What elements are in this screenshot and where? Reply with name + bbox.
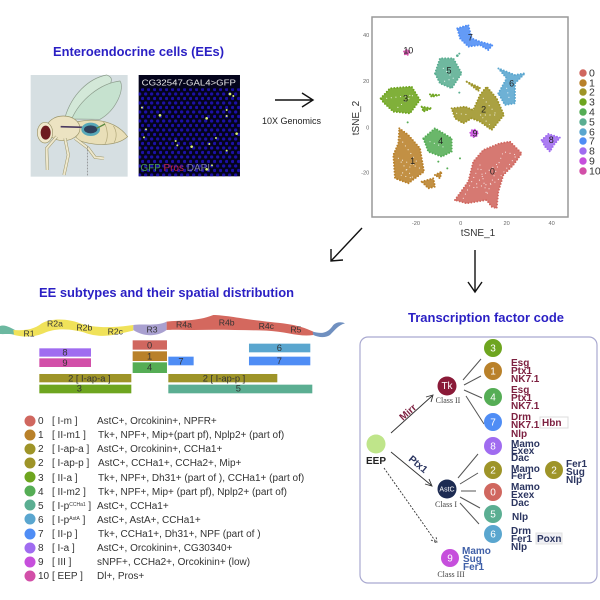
subtype 1 bbox=[484, 358, 540, 385]
subtype 7: Drm bbox=[511, 412, 531, 423]
list: EE subtype markers: [ I-a ] bbox=[52, 543, 75, 554]
node: EEP bbox=[366, 434, 386, 467]
list: EE subtype markers: 10 bbox=[38, 571, 50, 582]
cluster 9 bbox=[470, 130, 478, 137]
list: EE subtype markers: [ I-ap-p ] bbox=[52, 458, 89, 469]
subtype 7: Nlp bbox=[511, 429, 527, 440]
node: AstC class I: AstC bbox=[439, 486, 455, 494]
chart: subtype distribution bars: 8 bbox=[62, 348, 68, 358]
list: EE subtype markers: 9 bbox=[38, 557, 44, 568]
list: EE subtype markers: AstC+, CCHa1+, CCHa2+, Mip+ bbox=[98, 458, 242, 469]
chart: subtype distribution bars: 7 bbox=[277, 356, 282, 366]
list: EE subtype markers: [ II-a ] bbox=[52, 473, 78, 484]
list: EE subtype markers: AstA bbox=[69, 516, 80, 522]
list: EE subtype markers: CCHa1 bbox=[69, 502, 86, 508]
legend: clusters: 5 bbox=[589, 116, 595, 128]
cluster 0 bbox=[455, 142, 522, 208]
subtype 4: 4 bbox=[490, 392, 496, 404]
subtype 1: NK7.1 bbox=[511, 374, 540, 385]
list: EE subtype markers: 5 bbox=[38, 501, 44, 512]
list: EE subtype markers: AstC+, Orcokinin+, CCHa1+ bbox=[97, 444, 222, 455]
subtype 6: 6 bbox=[490, 530, 496, 540]
legend: clusters: 0 bbox=[589, 68, 595, 80]
arrow: to 10X Genomics bbox=[275, 93, 313, 107]
diagram: gut regions: R4c bbox=[259, 321, 275, 331]
list: EE subtype markers: 4 bbox=[38, 487, 44, 498]
subtype 1: Ptx1 bbox=[511, 366, 533, 377]
subtype 8 bbox=[484, 437, 540, 464]
node: EEP: EEP bbox=[366, 456, 386, 467]
subtype 2 bbox=[484, 461, 540, 482]
list: EE subtype markers: Tk+, CCHa1+, Dh31+, NPF (part of ) bbox=[98, 529, 261, 540]
list: EE subtype markers: [ I-m ] bbox=[52, 416, 78, 427]
subtype 2: Mamo bbox=[511, 464, 540, 475]
chart: tSNE scatter: 8 bbox=[549, 135, 554, 145]
cluster 8 bbox=[542, 134, 560, 152]
node: Tk class II bbox=[436, 376, 461, 405]
connector lines bbox=[458, 359, 484, 524]
subtype 3 bbox=[484, 339, 502, 357]
subtype 1: Esg bbox=[511, 358, 529, 369]
subtype 7: NK7.1 bbox=[511, 420, 540, 431]
list: EE subtype markers: AstC+, CCHa1+ bbox=[97, 501, 169, 512]
legend: clusters: 6 bbox=[589, 126, 595, 138]
diagram: gut regions: R2a bbox=[47, 318, 63, 328]
chart: tSNE scatter: 9 bbox=[472, 129, 477, 139]
subtype 2: Fer1 bbox=[511, 471, 533, 482]
subtype 2 alternate bbox=[545, 459, 588, 486]
list: EE subtype markers: 2 bbox=[38, 444, 44, 455]
subtype 6 bbox=[484, 525, 562, 553]
chart: subtype distribution bars: 0 bbox=[147, 340, 152, 350]
diagram: gut regions: R2b bbox=[76, 322, 92, 332]
subtype 0: Dac bbox=[511, 498, 530, 509]
subtype 6: Drm bbox=[511, 526, 531, 537]
subtype 0: Mamo bbox=[511, 482, 540, 493]
arrow: Mirr bbox=[391, 395, 433, 433]
subtype 0 bbox=[484, 482, 540, 509]
chart: tSNE scatter: 0 bbox=[366, 125, 369, 131]
list: EE subtype markers: 7 bbox=[38, 529, 44, 540]
list: EE subtype markers: AstC+, Orcokinin+, NPFR+ bbox=[97, 416, 217, 427]
micrograph: CG32547-GAL4>GFP bbox=[139, 75, 240, 176]
chart: subtype distribution bars: 6 bbox=[277, 343, 282, 353]
chart: tSNE scatter: 20 bbox=[363, 79, 369, 85]
subtype 7 bbox=[484, 412, 568, 440]
chart: tSNE scatter: tSNE_1 bbox=[461, 228, 496, 239]
diagram: gut regions bbox=[0, 315, 345, 338]
list: EE subtype markers: ] bbox=[86, 501, 91, 512]
illustration: fruit fly with gut bbox=[31, 75, 128, 177]
micrograph: CG32547-GAL4>GFP: GFP Pros DAPI bbox=[140, 163, 210, 174]
cluster 6 bbox=[498, 68, 525, 105]
subtype 0: 0 bbox=[490, 488, 496, 498]
subtype 8: Mamo bbox=[511, 439, 540, 450]
chart: tSNE scatter: 0 bbox=[490, 166, 495, 176]
legend: clusters: 1 bbox=[589, 78, 595, 90]
title: Enteroendocrine cells: Enteroendocrine cells (EEs) bbox=[53, 45, 224, 59]
chart: tSNE scatter: -20 bbox=[361, 171, 369, 177]
list: EE subtype markers: [ I-p bbox=[52, 515, 69, 526]
chart: tSNE scatter: 2 bbox=[481, 104, 486, 114]
list: EE subtype markers: [ EEP ] bbox=[52, 571, 83, 582]
chart: subtype distribution bars: 3 bbox=[77, 384, 82, 394]
legend: clusters bbox=[579, 68, 600, 178]
chart: subtype distribution bars: 1 bbox=[147, 351, 152, 361]
chart: tSNE scatter: 0 bbox=[459, 221, 462, 227]
subtype 9 class III bbox=[437, 546, 491, 579]
chart: tSNE scatter: 3 bbox=[403, 94, 408, 104]
list: EE subtype markers: [ I-p bbox=[52, 501, 69, 512]
node: AstC class I: Class I bbox=[435, 500, 457, 509]
list: EE subtype markers: 1 bbox=[38, 430, 44, 441]
list: EE subtype markers: sNPF+, CCHa2+, Orcokinin+ (low) bbox=[97, 557, 250, 568]
chart: tSNE scatter: -20 bbox=[412, 221, 420, 227]
list: EE subtype markers bbox=[24, 416, 304, 582]
legend: clusters: 9 bbox=[589, 156, 595, 168]
list: EE subtype markers: AstC+, AstA+, CCHa1+ bbox=[97, 515, 201, 526]
subtype 3: 3 bbox=[490, 344, 496, 354]
node: Tk class II: Tk bbox=[441, 381, 454, 392]
subtype 4: Esg bbox=[511, 385, 529, 396]
subtype 2 alternate: 2 bbox=[551, 466, 557, 476]
subtype 4: Ptx1 bbox=[511, 393, 533, 404]
subtype 2: 2 bbox=[490, 466, 496, 476]
subtype 4 bbox=[484, 385, 540, 412]
subtype 0: Exex bbox=[511, 490, 535, 501]
cluster 7 bbox=[457, 25, 493, 50]
chart: tSNE scatter: 1 bbox=[410, 156, 415, 166]
cluster 3 bbox=[381, 87, 439, 113]
diagram: gut regions: R1 bbox=[23, 328, 35, 338]
subtype 6: Poxn bbox=[537, 534, 561, 545]
list: EE subtype markers: 8 bbox=[38, 543, 44, 554]
legend: clusters: 4 bbox=[589, 106, 595, 118]
list: EE subtype markers: Dl+, Pros+ bbox=[97, 571, 144, 582]
subtype 9 class III: 9 bbox=[447, 554, 453, 564]
list: EE subtype markers: [ II-m1 ] bbox=[52, 430, 86, 441]
list: EE subtype markers: [ II-p ] bbox=[52, 529, 78, 540]
subtype 2 alternate: Nlp bbox=[566, 475, 582, 486]
diagram: gut regions: R2c bbox=[108, 327, 124, 337]
chart: subtype distribution bars: 2 [ I-ap-p ] bbox=[203, 373, 245, 383]
legend: clusters: 3 bbox=[589, 96, 595, 108]
subtype 5: 5 bbox=[490, 510, 496, 520]
chart: tSNE scatter: 4 bbox=[438, 136, 443, 146]
heading: EE subtypes: EE subtypes and their spatial distribution bbox=[39, 286, 294, 300]
list: EE subtype markers: 3 bbox=[38, 473, 44, 484]
list: EE subtype markers: [ I-ap-a ] bbox=[52, 444, 89, 455]
cluster 5 bbox=[435, 58, 462, 88]
label: Mirr: Mirr bbox=[398, 402, 419, 423]
chart: tSNE scatter: 7 bbox=[468, 33, 473, 43]
subtype 7: Hbn bbox=[542, 418, 561, 429]
subtype 6: Fer1 bbox=[511, 534, 533, 545]
chart: tSNE scatter bbox=[351, 17, 568, 239]
subtype 6: Nlp bbox=[511, 542, 527, 553]
subtype 2 alternate: Sug bbox=[566, 467, 585, 478]
list: EE subtype markers: Tk+, NPF+, Mip+ (part pf), Nplp2+ (part of) bbox=[98, 487, 287, 498]
subtype 9 class III: Class III bbox=[437, 570, 465, 579]
list: EE subtype markers: ] bbox=[80, 515, 86, 526]
chart: subtype distribution bars: 4 bbox=[147, 363, 152, 373]
list: EE subtype markers: 2 bbox=[38, 458, 44, 469]
chart: tSNE scatter: 20 bbox=[504, 221, 510, 227]
subtype 4: NK7.1 bbox=[511, 401, 540, 412]
list: EE subtype markers: 6 bbox=[38, 515, 44, 526]
subtype 5 bbox=[484, 505, 528, 523]
list: EE subtype markers: [ III ] bbox=[52, 557, 72, 568]
chart: tSNE scatter: 6 bbox=[509, 79, 514, 89]
cluster 2 bbox=[452, 82, 504, 130]
subtype 9 class III: Sug bbox=[463, 554, 482, 565]
chart: tSNE scatter: 40 bbox=[548, 221, 555, 227]
list: EE subtype markers: Tk+, NPF+, Dh31+ (part of ), CCHa1+ (part of) bbox=[98, 473, 304, 484]
chart: tSNE scatter: tSNE_2 bbox=[351, 100, 362, 135]
chart: tSNE scatter: 5 bbox=[446, 66, 451, 76]
cluster 1 bbox=[393, 128, 442, 188]
chart: subtype distribution bars: 7 bbox=[178, 356, 184, 366]
diagram: gut regions: R4b bbox=[219, 317, 235, 327]
micrograph: CG32547-GAL4>GFP: CG32547-GAL4>GFP bbox=[142, 79, 236, 88]
list: EE subtype markers: [ II-m2 ] bbox=[52, 487, 86, 498]
cluster 10 bbox=[404, 50, 409, 55]
subtype 9 class III: Mamo bbox=[462, 546, 491, 557]
subtype 8: 8 bbox=[490, 442, 496, 452]
node: AstC class I bbox=[435, 480, 457, 509]
chart: subtype distribution bars: 2 [ I-ap-a ] bbox=[68, 373, 111, 383]
chart: subtype distribution bars: 9 bbox=[62, 358, 68, 368]
arrow: down-left bbox=[331, 228, 362, 261]
panel: transcription factor tree bbox=[360, 337, 597, 583]
subtype 2 alternate: Fer1 bbox=[566, 459, 588, 470]
diagram: gut regions: R5 bbox=[290, 324, 302, 334]
arrow: Ptx1 bbox=[391, 452, 432, 486]
subtype 8: Exex bbox=[511, 446, 535, 457]
arrow: dashed to class III bbox=[384, 468, 437, 543]
heading: Transcription factor code: Transcription factor code bbox=[408, 311, 564, 325]
diagram: gut regions: R3 bbox=[146, 324, 158, 334]
legend: clusters: 2 bbox=[589, 86, 595, 98]
list: EE subtype markers: 0 bbox=[38, 416, 44, 427]
label: Ptx1: Ptx1 bbox=[406, 454, 430, 476]
legend: clusters: 8 bbox=[589, 146, 595, 158]
label: 10X Genomics: 10X Genomics bbox=[262, 116, 322, 126]
subtype 5: Nlp bbox=[512, 512, 528, 523]
arrow: down bbox=[468, 250, 482, 292]
legend: clusters: 7 bbox=[589, 136, 595, 148]
list: EE subtype markers: Tk+, NPF+, Mip+(part pf), Nplp2+ (part of) bbox=[98, 430, 284, 441]
chart: subtype distribution bars: 5 bbox=[236, 384, 241, 394]
subtype 9 class III: Fer1 bbox=[463, 562, 485, 573]
chart: subtype distribution bars bbox=[39, 340, 312, 394]
node: Tk class II: Class II bbox=[436, 396, 461, 405]
subtype 1: 1 bbox=[490, 366, 496, 378]
chart: tSNE scatter: 10 bbox=[403, 45, 413, 55]
chart: tSNE scatter: 40 bbox=[363, 33, 369, 39]
list: EE subtype markers: AstC+, Orcokinin+, CG30340+ bbox=[97, 543, 233, 554]
subtype 8: Dac bbox=[511, 453, 530, 464]
diagram: gut regions: R4a bbox=[176, 320, 192, 330]
cluster 4 bbox=[423, 128, 452, 157]
subtype 7: 7 bbox=[490, 418, 496, 428]
